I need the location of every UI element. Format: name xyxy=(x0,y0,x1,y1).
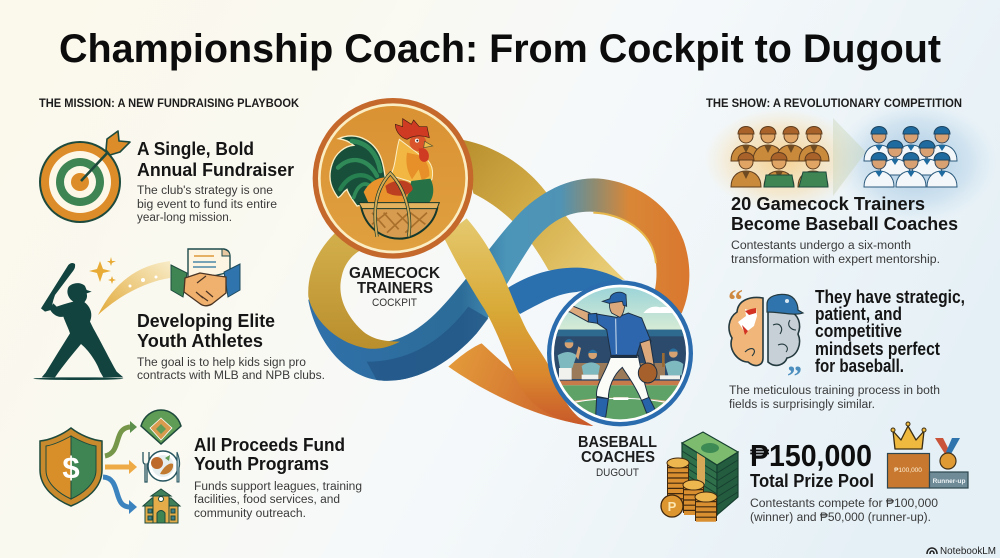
label: gamecock trainers: COCKPIT xyxy=(372,297,417,309)
text: 20 trainers: Become Baseball Coaches xyxy=(731,214,958,234)
icon: podium xyxy=(888,454,968,488)
icon: brain with rooster and cap xyxy=(729,294,803,365)
text: single fundraiser: The club's strategy is one xyxy=(137,185,273,197)
mission heading: THE MISSION: A NEW FUNDRAISING PLAYBOOK xyxy=(39,96,299,110)
icon: cash stack and coins: P xyxy=(668,499,677,514)
footer: NotebookLM mark: NotebookLM xyxy=(940,545,996,557)
text: mindset quote: The meticulous training process in both xyxy=(729,385,940,397)
text: single fundraiser xyxy=(137,139,294,224)
icon: crown xyxy=(891,422,926,449)
icon: gamecock trainers group xyxy=(731,126,829,187)
label: gamecock trainers: GAMECOCK xyxy=(349,265,440,282)
text: mindset quote: competitive xyxy=(815,321,902,341)
coach illustration xyxy=(554,287,686,420)
arrows: shield to programs xyxy=(103,421,137,514)
head and cap xyxy=(609,301,625,317)
text: single fundraiser: Annual Fundraiser xyxy=(137,160,294,180)
label: gamecock trainers: TRAINERS xyxy=(357,280,433,297)
icon: target with arrow xyxy=(39,131,130,223)
panel: show xyxy=(661,96,997,524)
dugout players xyxy=(558,339,683,380)
torso and arm xyxy=(597,313,651,355)
text: prize pool xyxy=(750,438,938,524)
icon: handshake with contract xyxy=(171,249,240,306)
show heading: THE SHOW: A REVOLUTIONARY COMPETITION xyxy=(706,96,962,110)
icon: quotation marks: “ xyxy=(728,284,743,317)
ribbon: gold upper xyxy=(463,140,625,280)
icon: shield with dollar: $ xyxy=(62,450,80,485)
icon: cash stack and coins xyxy=(661,432,738,523)
rooster illustration xyxy=(330,119,439,239)
icon: sparkles and swoosh xyxy=(89,257,170,315)
text: proceeds xyxy=(194,435,362,520)
text: prize pool: Contestants compete for ₱100,000 xyxy=(750,498,938,510)
text: prize pool: (winner) and ₱50,000 (runner-up). xyxy=(750,512,931,524)
glow backgrounds xyxy=(704,100,997,224)
text: proceeds: Youth Programs xyxy=(194,454,329,474)
text: single fundraiser: big event to fund its entire xyxy=(137,199,277,211)
label: baseball coaches: BASEBALL xyxy=(578,434,657,451)
text: single fundraiser: year-long mission. xyxy=(137,212,232,224)
text: mindset quote xyxy=(729,287,965,411)
medallion: gamecock xyxy=(313,98,473,259)
title: Championship Coach: From Cockpit to Dugout xyxy=(59,27,941,71)
text: prize pool: ₱150,000 xyxy=(750,438,872,473)
legs xyxy=(597,355,649,401)
text: youth athletes: Youth Athletes xyxy=(137,331,263,351)
icon: podium: ₱100,000 xyxy=(894,467,922,474)
ribbon: blue centre band xyxy=(500,268,625,314)
text: mindset quote: patient, and xyxy=(815,304,902,324)
label: gamecock trainers xyxy=(349,265,440,309)
text: youth athletes: contracts with MLB and NPB clubs. xyxy=(137,370,325,382)
icon: batter silhouette xyxy=(33,263,123,380)
medallion: baseball coach xyxy=(545,278,695,429)
text: 20 trainers xyxy=(731,194,958,266)
text: youth athletes xyxy=(137,311,325,382)
text: 20 trainers: Contestants undergo a six-month xyxy=(731,240,911,252)
label: baseball coaches: COACHES xyxy=(581,449,655,466)
text: proceeds: Funds support leagues, training xyxy=(194,481,362,493)
icon: baseball field xyxy=(141,410,181,444)
text: proceeds: facilities, food services, and xyxy=(194,494,340,506)
text: mindset quote: fields is surprisingly similar. xyxy=(729,399,875,411)
ribbon: orange lower xyxy=(448,343,593,426)
label: baseball coaches xyxy=(578,434,657,479)
text: mindset quote: mindsets perfect xyxy=(815,339,940,359)
text: youth athletes: The goal is to help kids sign pro xyxy=(137,357,306,369)
icon: quotation marks: ” xyxy=(787,360,802,393)
text: 20 trainers: transformation with expert mentorship. xyxy=(731,254,940,266)
text: proceeds: community outreach. xyxy=(194,508,306,520)
text: prize pool: Total Prize Pool xyxy=(750,471,874,491)
icon: plate of food xyxy=(143,451,180,482)
text: mindset quote: They have strategic, xyxy=(815,287,965,307)
text: youth athletes: Developing Elite xyxy=(137,311,275,331)
icon: podium: Runner-up xyxy=(933,478,965,485)
icon: baseball coaches group xyxy=(864,126,957,187)
infinity ribbon diagram xyxy=(308,98,695,429)
icon: quotation marks xyxy=(728,284,802,393)
text: 20 trainers: 20 Gamecock Trainers xyxy=(731,194,925,214)
text: single fundraiser: A Single, Bold xyxy=(137,139,254,159)
ribbon: gold centre band xyxy=(443,218,593,426)
icon: school building xyxy=(143,489,180,523)
panel: mission xyxy=(33,96,362,523)
ribbon: gold left loop xyxy=(308,223,400,349)
ribbon: blue to orange band xyxy=(308,178,689,381)
icon: shield with dollar xyxy=(40,428,102,506)
icon: medal xyxy=(935,438,960,469)
label: baseball coaches: DUGOUT xyxy=(596,467,639,479)
text: mindset quote: for baseball. xyxy=(815,356,904,376)
text: proceeds: All Proceeds Fund xyxy=(194,435,345,455)
